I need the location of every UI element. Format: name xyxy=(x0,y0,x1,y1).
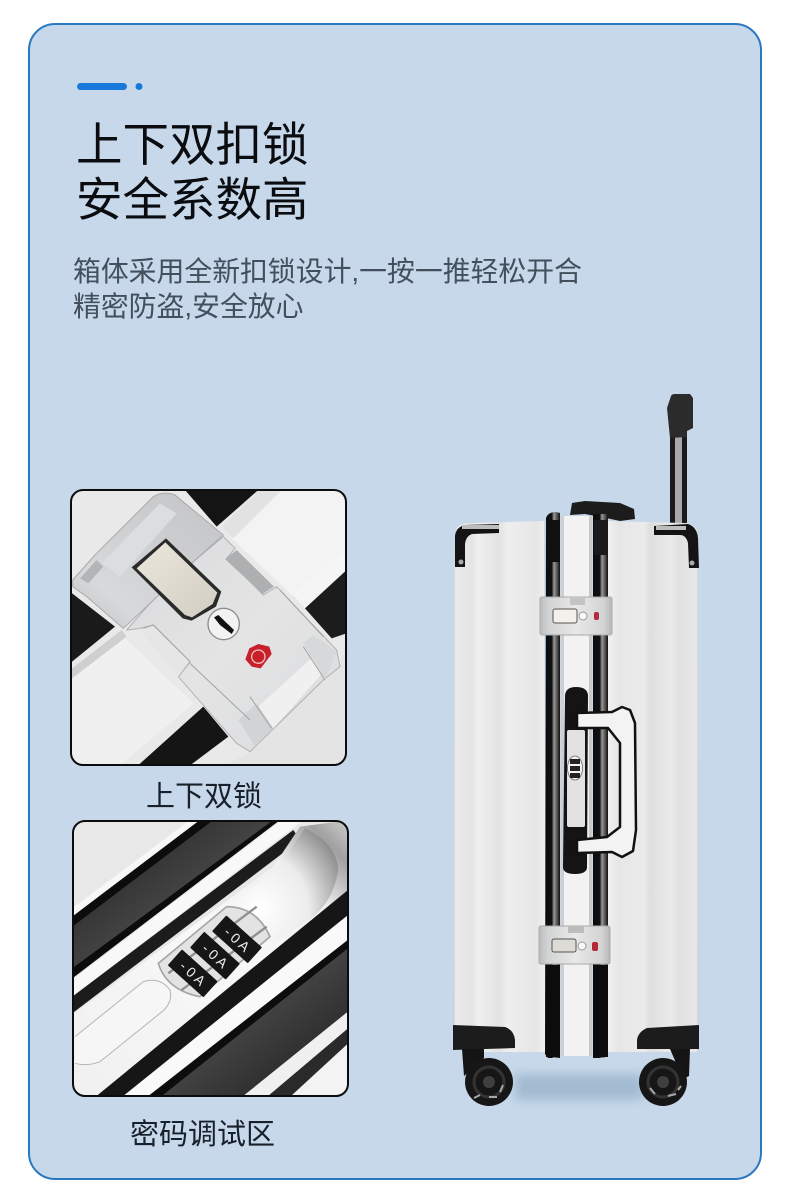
title: 上下双扣锁 xyxy=(76,119,308,171)
side carry handle xyxy=(577,707,636,857)
upper right white shell xyxy=(230,490,350,597)
suitcase product image xyxy=(453,394,699,1106)
description text xyxy=(73,256,582,322)
TSA red badge xyxy=(245,644,272,668)
three number dials: - 0 A xyxy=(199,940,232,972)
window cutout xyxy=(225,550,274,594)
black rails xyxy=(185,490,258,527)
right shell xyxy=(607,521,699,1052)
left shell xyxy=(453,521,546,1052)
corner protector: top left xyxy=(455,524,499,567)
lower frame lock xyxy=(539,926,610,964)
floor shadow xyxy=(515,1074,643,1100)
lower dark band xyxy=(143,938,350,1100)
white stripe xyxy=(70,820,303,998)
caption: double lock: 上下双锁 xyxy=(146,780,262,813)
black line xyxy=(70,830,300,1015)
telescopic handle xyxy=(667,394,693,523)
lock ridge lines xyxy=(143,590,325,728)
accent bar and dot xyxy=(77,83,142,90)
left lock cap xyxy=(73,493,223,628)
title xyxy=(76,119,308,226)
three number dials: - 0 A xyxy=(221,924,254,955)
three number dials xyxy=(168,915,262,997)
top carry handle xyxy=(570,501,635,521)
description text: 精密防盗,安全放心 xyxy=(73,291,304,322)
lower black rail xyxy=(92,888,350,1100)
slider button xyxy=(132,538,221,621)
lock plate xyxy=(127,537,340,752)
dial window xyxy=(158,907,270,997)
right lock bands xyxy=(259,658,321,728)
centre frame xyxy=(545,512,608,1058)
top white edge xyxy=(74,822,197,915)
oval recess outline xyxy=(75,980,171,1065)
three number dials: - 0 A xyxy=(177,958,209,989)
chrome bowl xyxy=(252,828,338,919)
dark upper band xyxy=(70,820,280,980)
lower left white shell xyxy=(70,637,193,767)
handle slot with combination lock xyxy=(563,687,588,874)
corner protector: top right xyxy=(654,524,699,568)
caption: combination zone: 密码调试区 xyxy=(130,1118,275,1151)
title: 安全系数高 xyxy=(76,174,308,226)
silver handle recess xyxy=(70,820,350,1100)
bottom right stripes xyxy=(244,1012,347,1095)
left wheel assembly xyxy=(453,1025,515,1106)
photo panel: combination dial close-up xyxy=(70,820,350,1100)
description text: 箱体采用全新扣锁设计,一按一推轻松开合 xyxy=(73,256,582,287)
upper frame lock xyxy=(540,597,612,635)
lower white stripe xyxy=(118,913,350,1100)
photo panel: double lock close-up xyxy=(70,490,350,767)
keyhole xyxy=(208,608,239,640)
right wheel assembly xyxy=(637,1025,699,1106)
